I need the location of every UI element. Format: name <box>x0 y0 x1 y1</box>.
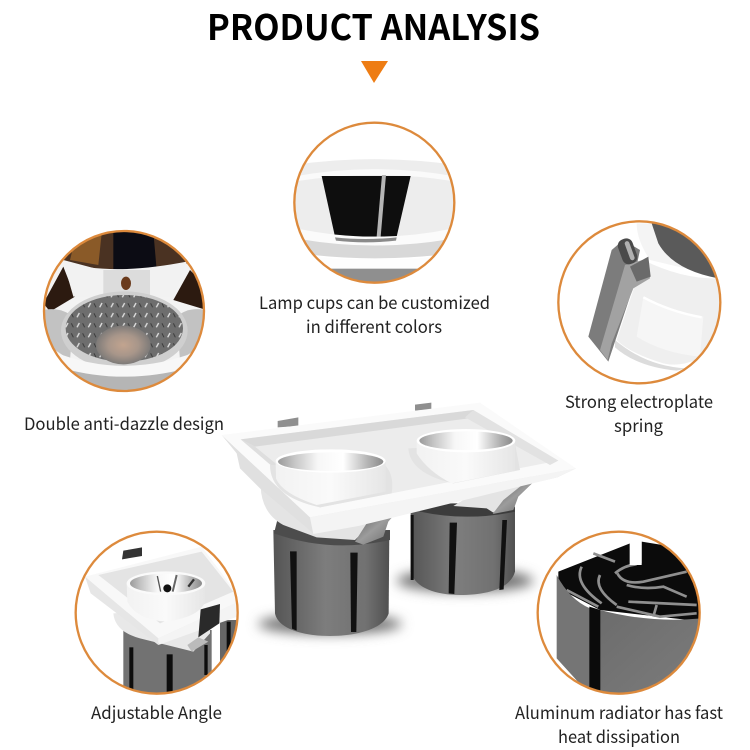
mounting clips <box>278 403 431 427</box>
floor shadows <box>258 569 533 634</box>
white frame <box>222 403 576 534</box>
metal springs <box>355 478 537 545</box>
caption: spring: spring <box>614 412 663 437</box>
main product: double recessed spotlight <box>222 403 576 636</box>
icon: orange down triangle <box>361 61 388 83</box>
caption: aluminum radiator <box>515 699 724 748</box>
caption: lamp cups <box>259 289 490 338</box>
right heat sink cylinder <box>411 503 515 595</box>
caption: lamp cups: Lamp cups can be customized <box>259 289 490 314</box>
caption: lamp cups: in different colors <box>306 313 442 338</box>
caption: aluminum radiator: heat dissipation <box>558 723 680 748</box>
caption: anti-dazzle: Double anti-dazzle design <box>24 410 224 435</box>
detail circle: aluminum radiator <box>537 530 703 698</box>
right lamp cup <box>408 429 520 483</box>
housing under frame <box>261 470 537 540</box>
detail circle: adjustable angle <box>73 530 242 697</box>
caption: spring: Strong electroplate <box>565 388 713 413</box>
caption: spring <box>565 388 713 437</box>
caption: aluminum radiator: Aluminum radiator has fast <box>515 699 724 724</box>
left lamp cup <box>270 449 392 507</box>
detail circle: anti-dazzle lens <box>43 230 207 397</box>
title: PRODUCT ANALYSIS <box>207 0 540 51</box>
detail circle: electroplate spring <box>557 220 723 387</box>
caption: adjustable angle: Adjustable Angle <box>91 699 222 724</box>
detail circle: lamp cup <box>290 120 460 289</box>
left heat sink cylinder <box>273 520 390 636</box>
